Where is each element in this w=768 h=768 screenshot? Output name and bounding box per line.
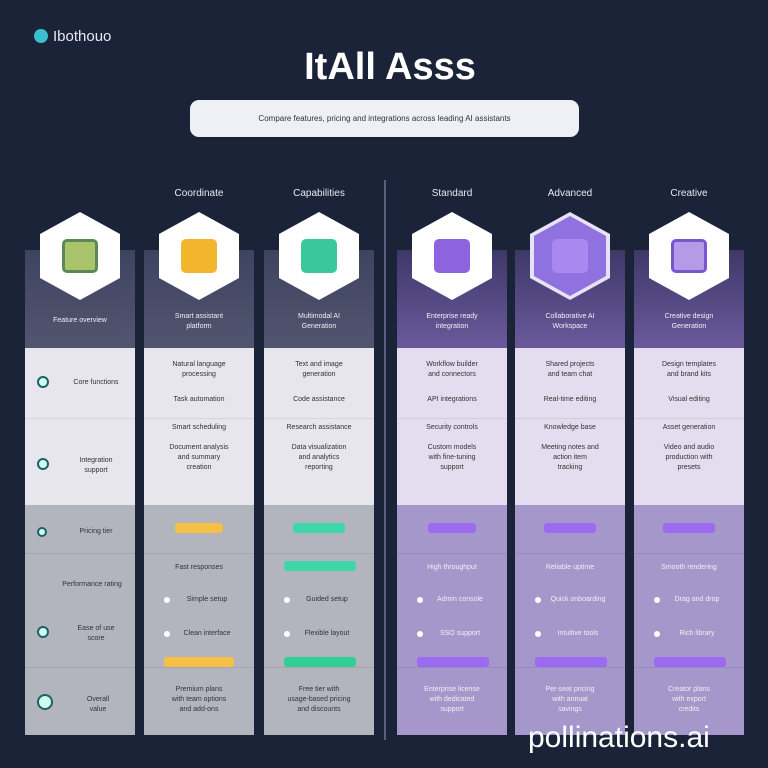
column 3: Research assistance [286, 424, 351, 431]
column 2: Fast responses [175, 564, 223, 571]
icon: column 6 [649, 212, 729, 300]
column 5: with annual [552, 696, 588, 703]
column 1 (labels): Ease of use [78, 625, 114, 632]
column 3 [264, 250, 374, 735]
icon: column 2 [159, 212, 239, 300]
column 4: integration [436, 323, 468, 330]
column 6: Visual editing [668, 396, 710, 403]
column labels: Coordinate [175, 188, 223, 199]
column 4 [397, 250, 507, 735]
column 5: Collaborative AI [545, 313, 595, 320]
column 5: action item [553, 454, 587, 461]
column 6: Video and audio [664, 444, 714, 451]
column 1 (labels): Pricing tier [79, 528, 113, 535]
column 6: presets [678, 464, 700, 471]
column 5: Knowledge base [544, 424, 596, 431]
column 2: Premium plans [176, 686, 222, 693]
column 1 (labels): Overall [87, 696, 109, 703]
icon: column 1 [40, 212, 120, 300]
column 2: Document analysis [169, 444, 229, 451]
column 5 [515, 250, 625, 735]
bars: column 6 [663, 523, 715, 533]
column 6: and brand kits [667, 371, 711, 378]
column 5: Per-seat pricing [545, 686, 595, 693]
column 1 (labels): score [87, 635, 105, 642]
column 3: Free tier with [299, 686, 339, 693]
title: ItAll Asss [304, 46, 476, 88]
column 2: and add-ons [180, 706, 218, 713]
column 1 (labels): support [84, 467, 108, 474]
column 2: processing [182, 371, 216, 378]
column 3: Code assistance [293, 396, 345, 403]
column 6: with export [672, 696, 706, 703]
column 2: Simple setup [187, 596, 227, 603]
column 3: Data visualization [292, 444, 346, 451]
column 1 (labels): Core functions [73, 379, 119, 386]
column label 6: Creative [670, 188, 708, 199]
column 6: Drag and drop [675, 596, 719, 603]
column 4: High throughput [427, 564, 477, 571]
column 3: Multimodal AI [298, 313, 340, 320]
column 1 (labels) [25, 250, 135, 735]
column 2: Clean interface [183, 630, 231, 637]
column 3: Guided setup [306, 596, 348, 603]
column 4: Admin console [437, 596, 483, 603]
subtitle bar [190, 100, 579, 137]
bars: column 3 [293, 523, 345, 533]
column 5: tracking [558, 464, 582, 471]
column 6: Asset generation [663, 424, 715, 431]
column 4: API integrations [427, 396, 477, 403]
column 6 [634, 250, 744, 735]
column 2: Smart assistant [175, 313, 223, 320]
column 1 (labels): value [90, 706, 106, 713]
column 5: Real-time editing [544, 396, 596, 403]
column 5: Intuitive tools [558, 630, 598, 637]
bars: column 5 [544, 523, 596, 533]
column 2 [144, 250, 254, 735]
subtitle bar: Compare features, pricing and integrations across leading AI assistants [258, 114, 511, 123]
column 3: reporting [305, 464, 333, 471]
column 3: Generation [302, 323, 336, 330]
icon: column 5 [530, 212, 610, 300]
column 5: Meeting notes and [541, 444, 599, 451]
column label 4: Standard [432, 188, 472, 199]
column 4: with dedicated [430, 696, 474, 703]
column 4: SSO support [440, 630, 480, 637]
column label 3: Capabilities [293, 188, 345, 199]
column 2: creation [187, 464, 211, 471]
column 2: Natural language [172, 361, 226, 368]
watermark: pollinations.ai [528, 721, 710, 754]
bars: column 2 [175, 523, 223, 533]
column 3: generation [302, 371, 336, 378]
icon: column 4 [412, 212, 492, 300]
icon: logo mark [34, 29, 48, 43]
column 4: Custom models [428, 444, 476, 451]
column 1 (labels): Integration [79, 457, 113, 464]
column 3: usage-based pricing [287, 696, 351, 703]
bars: column 4 [428, 523, 476, 533]
column 4: Enterprise license [424, 686, 480, 693]
column 5: Workspace [553, 323, 587, 330]
column 6: Generation [672, 323, 706, 330]
column 5: and team chat [548, 371, 592, 378]
column 6: production with [665, 454, 713, 461]
column 5: Quick onboarding [551, 596, 605, 603]
column 1 (labels): Feature overview [53, 317, 107, 324]
column 5: Shared projects [545, 361, 595, 368]
column 5: Reliable uptime [546, 564, 594, 571]
column 3: and analytics [299, 454, 339, 461]
logo: Ibothouo [53, 28, 111, 44]
column 4: Workflow builder [426, 361, 478, 368]
column 2: Task automation [174, 396, 224, 403]
icon: column 3 [279, 212, 359, 300]
column 2: and summary [178, 454, 220, 461]
column 2: Smart scheduling [172, 424, 226, 431]
column 3: Flexible layout [305, 630, 349, 637]
column 2: with team options [172, 696, 226, 703]
column 4: support [440, 464, 464, 471]
column 6: Creator plans [668, 686, 710, 693]
column label 5: Advanced [548, 188, 592, 199]
column 6: Design templates [662, 361, 716, 368]
column 3: Text and image [295, 361, 343, 368]
column 5: savings [558, 706, 582, 713]
column 6: credits [679, 706, 699, 713]
column 4: Enterprise ready [426, 313, 478, 320]
column 6: Creative design [665, 313, 713, 320]
column 4: Security controls [426, 424, 478, 431]
column 4: support [440, 706, 464, 713]
column 1 (labels): Performance rating [62, 581, 122, 588]
column 4: and connectors [428, 371, 476, 378]
column 6: Rich library [679, 630, 714, 637]
divider [384, 180, 386, 740]
column 2: platform [186, 323, 212, 330]
column 4: with fine-tuning [428, 454, 476, 461]
column 6: Smooth rendering [661, 564, 717, 571]
column 3: and discounts [297, 706, 341, 713]
